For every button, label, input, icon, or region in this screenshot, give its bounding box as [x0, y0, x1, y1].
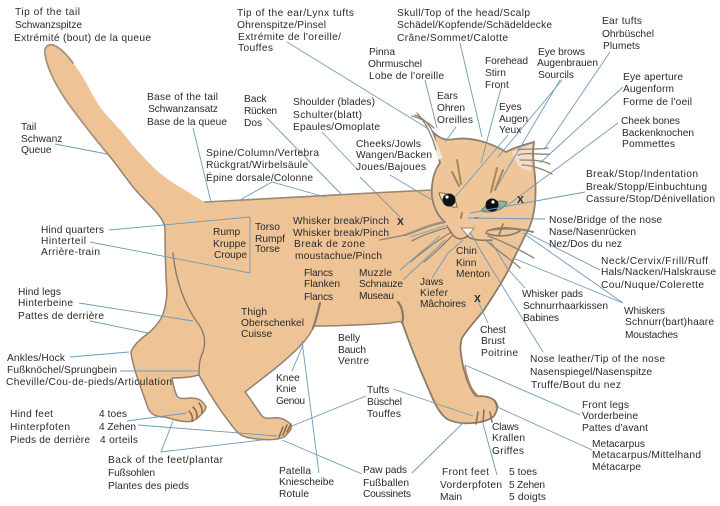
label: tail: Tail [21, 122, 36, 133]
label: spine: Épine dorsale/Colonne [206, 171, 313, 184]
label: back of the feet: Plantes des pieds [108, 481, 189, 492]
label: back of the feet: Back of the feet/plantar [108, 455, 224, 466]
front paw claws [476, 402, 498, 424]
inner leg and flank lines [173, 253, 480, 397]
label: nose leather: Nose leather/Tip of the nose [530, 354, 665, 365]
label: nose bridge: Nose/Bridge of the nose [549, 215, 662, 226]
marker: x points: X [474, 294, 481, 305]
label: hind legs: Hinterbeine [18, 298, 73, 309]
label: whisker break [293, 216, 389, 262]
label: spine: Spine/Column/Vertebra [206, 148, 319, 159]
label: muzzle [359, 268, 403, 302]
label: belly [338, 333, 369, 367]
label: nose bridge: Nez/Dos du nez [549, 239, 622, 250]
label: paw pads: Fußballen [363, 478, 409, 489]
label: tufts: Büschel [367, 397, 402, 408]
ear tufts [412, 113, 552, 174]
label: cheeks: Wangen/Backen [356, 150, 432, 161]
label: claws: Claws [492, 422, 519, 433]
label: back [244, 94, 277, 129]
label: ears: Oreilles [437, 115, 473, 126]
label: whisker break: Whisker break/Pinch [293, 228, 389, 239]
label: flanks: Flancs [304, 268, 333, 279]
label: front toes: 5 Zehen [509, 480, 545, 491]
label: back of the feet: Fußsohlen [108, 468, 155, 479]
marker: x points [397, 195, 524, 305]
label: hind quarters [41, 225, 104, 258]
label: base of the tail: Base of the tail [147, 92, 218, 103]
label: flanks: Flanken [304, 279, 340, 290]
label: eye aperture: Augenform [623, 84, 674, 95]
label: eyes: Yeux [499, 125, 521, 136]
label: knee: Knie [276, 384, 297, 395]
label: break stop: Break/Stopp/Einbuchtung [586, 182, 707, 193]
label: neck [601, 256, 716, 291]
label: skull: Crâne/Sommet/Calotte [397, 33, 508, 44]
label: whisker break: moustachue/Pinch [295, 251, 382, 262]
label: hind toes: 4 Zehen [99, 422, 136, 433]
label: pinna: Ohrmuschel [368, 59, 422, 70]
label: neck: Cou/Nuque/Colerette [601, 280, 704, 291]
label: chest [480, 325, 518, 359]
label: hind toes: 4 orteils [100, 435, 138, 446]
label: front legs: Front legs [582, 400, 629, 411]
label: front feet: Main [440, 492, 462, 503]
label: back: Back [244, 94, 268, 105]
label: cheeks: Joues/Bajoues [356, 162, 426, 173]
label: patella: Patella [279, 466, 311, 477]
label: tip of the ear [237, 8, 354, 54]
label: hind feet: Pieds de derrière [10, 435, 90, 446]
label: spine [206, 148, 319, 184]
label: tufts [367, 385, 402, 420]
icon: right eye [481, 198, 507, 212]
label: front legs: Vorderbeine [582, 411, 638, 422]
label: front legs [582, 400, 648, 434]
label: base of the tail [147, 92, 227, 128]
label: eye aperture: Forme de l'oeil [623, 97, 692, 108]
label: shoulder: Schulter(blatt) [293, 110, 362, 121]
label: neck: Hals/Nacken/Halskrause [601, 267, 716, 278]
label: tufts: Touffes [367, 409, 401, 420]
label: jaws: Mâchoires [420, 299, 466, 310]
label: muzzle: Muzzle [359, 268, 392, 279]
label: chest: Poitrine [481, 348, 518, 359]
body outlines [45, 45, 514, 440]
label: whisker pads [522, 289, 608, 324]
label: ears [437, 91, 473, 126]
label: rump: Croupe [214, 250, 247, 261]
label: front feet: Vorderpfoten [440, 480, 502, 491]
label: belly: Bauch [338, 345, 366, 356]
label: thigh: Cuisse [241, 329, 272, 340]
label: hind feet [10, 409, 90, 446]
label: ear tufts: Plumets [603, 41, 640, 52]
label: pinna: Pinna [369, 47, 395, 58]
label: torso [255, 222, 285, 255]
label: tip of the ear: Tip of the ear/Lynx tufts [237, 8, 354, 19]
mouth and muzzle [447, 224, 520, 240]
icon: right ear inner [512, 144, 532, 172]
label: whisker pads: Babines [523, 313, 559, 324]
marker: x points: X [517, 195, 524, 206]
label: torso: Rumpf [255, 234, 285, 245]
label: spine: Rückgrat/Wirbelsäule [206, 160, 308, 171]
label: metacarpus: Metacarpus [592, 439, 645, 450]
label: tip of the ear: Touffes [238, 43, 273, 54]
marker: x points: X [397, 217, 404, 228]
label: tufts: Tufts [367, 385, 389, 396]
label: whisker pads: Schnurrhaarkissen [523, 301, 608, 312]
label: front toes [509, 467, 546, 503]
label: thigh [241, 307, 304, 340]
label: shoulder: Epaules/Omoplate [293, 122, 380, 133]
label: break stop: Break/Stop/Indentation [586, 169, 698, 180]
label: claws [492, 422, 525, 457]
label: ankles: Ankles/Hock [7, 353, 66, 364]
whiskers [380, 222, 534, 268]
label: eye brows: Eye brows [538, 47, 585, 58]
label: hind legs: Pattes de derrière [18, 311, 104, 322]
label: metacarpus: Metacarpus/Mittelhand [592, 450, 701, 461]
cat body [45, 45, 530, 440]
label: skull [397, 8, 552, 44]
label: tail: Queue [21, 145, 52, 156]
label: whisker break: Whisker break/Pinch [293, 216, 389, 227]
label: ear tufts: Ohrbüschel [602, 29, 654, 40]
label: patella: Kniescheibe [279, 477, 334, 488]
label: eyes: Augen [499, 114, 528, 125]
label: break stop [586, 169, 715, 205]
label: chin: Chin [456, 246, 477, 257]
label: neck: Neck/Cervix/Frill/Ruff [601, 256, 708, 267]
label: front legs: Pattes d'avant [582, 423, 648, 434]
label: tip of the tail [14, 7, 151, 44]
label: cheek bones [621, 116, 694, 150]
label: shoulder: Shoulder (blades) [293, 97, 375, 108]
label: forehead [485, 56, 528, 91]
label: thigh: Thigh [241, 307, 267, 318]
label: hind feet: Hinterpfoten [10, 422, 70, 433]
label: chin: Kinn [456, 258, 476, 269]
label: rump [213, 227, 247, 261]
label: skull: Schädel/Kopfende/Schädeldecke [397, 20, 552, 31]
label: break stop: Cassure/Stop/Dénivellation [586, 194, 715, 205]
label: muzzle: Schnauze [359, 279, 403, 290]
label: belly: Ventre [338, 356, 369, 367]
label: nose leather [530, 354, 665, 391]
label: chest: Brust [481, 336, 505, 347]
label: eyes [499, 102, 528, 136]
label: rump: Kruppe [213, 239, 246, 250]
label: whiskers: Schnurr(bart)haare [625, 317, 714, 328]
label: tip of the tail: Schwanzspitze [15, 20, 82, 31]
label: shoulder [293, 97, 380, 133]
label: ear tufts: Ear tufts [602, 16, 642, 27]
label: claws: Krallen [492, 433, 525, 444]
forehead stripes [452, 160, 503, 218]
label: chest: Chest [480, 325, 506, 336]
label: flanks: Flancs [304, 292, 333, 303]
label: back of the feet [108, 455, 224, 492]
label: forehead: Forehead [485, 56, 528, 67]
label: hind toes: 4 toes [99, 409, 127, 420]
icon: left eye [439, 193, 457, 207]
label: back: Rücken [244, 106, 277, 117]
label: ear tufts [602, 16, 654, 52]
label: torso: Torso [255, 222, 280, 233]
label: front toes: 5 toes [509, 467, 537, 478]
label: pinna [368, 47, 444, 82]
label: patella: Rotule [279, 489, 309, 500]
label: tip of the tail: Tip of the tail [15, 7, 80, 18]
label: hind quarters: Arrière-train [41, 247, 100, 258]
label: base of the tail: Schwanzansatz [148, 104, 218, 115]
label: metacarpus: Métacarpe [592, 462, 641, 473]
label: thigh: Oberschenkel [241, 318, 304, 329]
label: hind legs [18, 287, 104, 322]
label: torso: Torse [255, 244, 280, 255]
label: forehead: Front [485, 80, 509, 91]
label: jaws: Jaws [420, 277, 443, 288]
label: eye brows: Sourcils [538, 70, 574, 81]
label: chin: Menton [456, 269, 490, 280]
label: tail [21, 122, 62, 156]
label: flanks [304, 268, 340, 303]
icon: left ear inner [432, 132, 443, 160]
label: whiskers: Whiskers [624, 306, 665, 317]
label: pinna: Lobe de l'oreille [369, 71, 444, 82]
label: eye brows: Augenbrauen [537, 58, 598, 69]
label: paw pads [363, 465, 411, 500]
label: eye aperture [623, 72, 692, 108]
label: hind quarters: Hind quarters [41, 225, 104, 236]
label: tail: Schwanz [21, 134, 62, 145]
label: eye brows [537, 47, 598, 81]
leader lines [55, 42, 623, 475]
label: nose bridge [549, 215, 662, 250]
label: ankles: Cheville/Cou-de-pieds/Articulation [6, 377, 172, 388]
label: whiskers [624, 306, 714, 341]
label: paw pads: Paw pads [363, 465, 407, 476]
label: metacarpus [592, 439, 701, 473]
label: paw pads: Coussinets [363, 489, 411, 500]
label: knee: Genou [276, 396, 305, 407]
label: knee [276, 373, 305, 407]
label: front feet: Front feet [442, 467, 489, 478]
label: tip of the ear: Ohrenspitze/Pinsel [237, 20, 326, 31]
label: muzzle: Museau [359, 291, 394, 302]
label: hind toes [99, 409, 138, 446]
label: nose bridge: Nase/Nasenrücken [549, 227, 636, 238]
label: hind feet: Hind feet [10, 409, 53, 420]
label: cheek bones: Backenknochen [622, 128, 694, 139]
label: back: Dos [244, 118, 262, 129]
label: rump: Rump [213, 227, 241, 238]
label: hind legs: Hind legs [18, 287, 61, 298]
label: base of the tail: Base de la queue [147, 117, 227, 128]
label: front feet [440, 467, 502, 503]
label: whisker pads: Whisker pads [522, 289, 583, 300]
label: whisker break: Break de zone [294, 239, 365, 250]
label: tip of the ear: Extrémite de l'oreille/ [238, 32, 341, 43]
label: nose leather: Truffe/Bout du nez [531, 380, 621, 391]
label: ankles [6, 353, 172, 388]
label: patella [279, 466, 334, 500]
label: whiskers: Moustaches [625, 330, 678, 341]
label: cheeks [356, 139, 432, 173]
label: jaws: Kiefer [420, 288, 449, 299]
label: claws: Griffes [492, 446, 524, 457]
label: jaws [420, 277, 466, 310]
label: ankles: Fußknöchel/Sprungbein [7, 365, 117, 376]
label: hind quarters: Hinterteil [41, 236, 86, 247]
label: skull: Skull/Top of the head/Scalp [397, 8, 530, 19]
label: tip of the tail: Extrémité (bout) de la queue [14, 33, 151, 44]
label: cheek bones: Cheek bones [621, 116, 680, 127]
label: nose leather: Nasenspiegel/Nasenspitze [530, 367, 652, 378]
hind paw toes [189, 403, 291, 437]
label: knee: Knee [276, 373, 300, 384]
label: eyes: Eyes [499, 102, 522, 113]
cat illustration [45, 45, 552, 440]
cat head [412, 113, 552, 258]
label: front toes: 5 doigts [509, 492, 546, 503]
icon: nose [461, 228, 474, 236]
label: cheek bones: Pommettes [622, 139, 675, 150]
label: belly: Belly [338, 333, 361, 344]
label: ears: Ohren [437, 103, 465, 114]
label: forehead: Stirn [485, 68, 506, 79]
label: cheeks: Cheeks/Jowls [356, 139, 421, 150]
label: eye aperture: Eye aperture [623, 72, 683, 83]
label: chin [456, 246, 490, 280]
label: ears: Ears [437, 91, 458, 102]
